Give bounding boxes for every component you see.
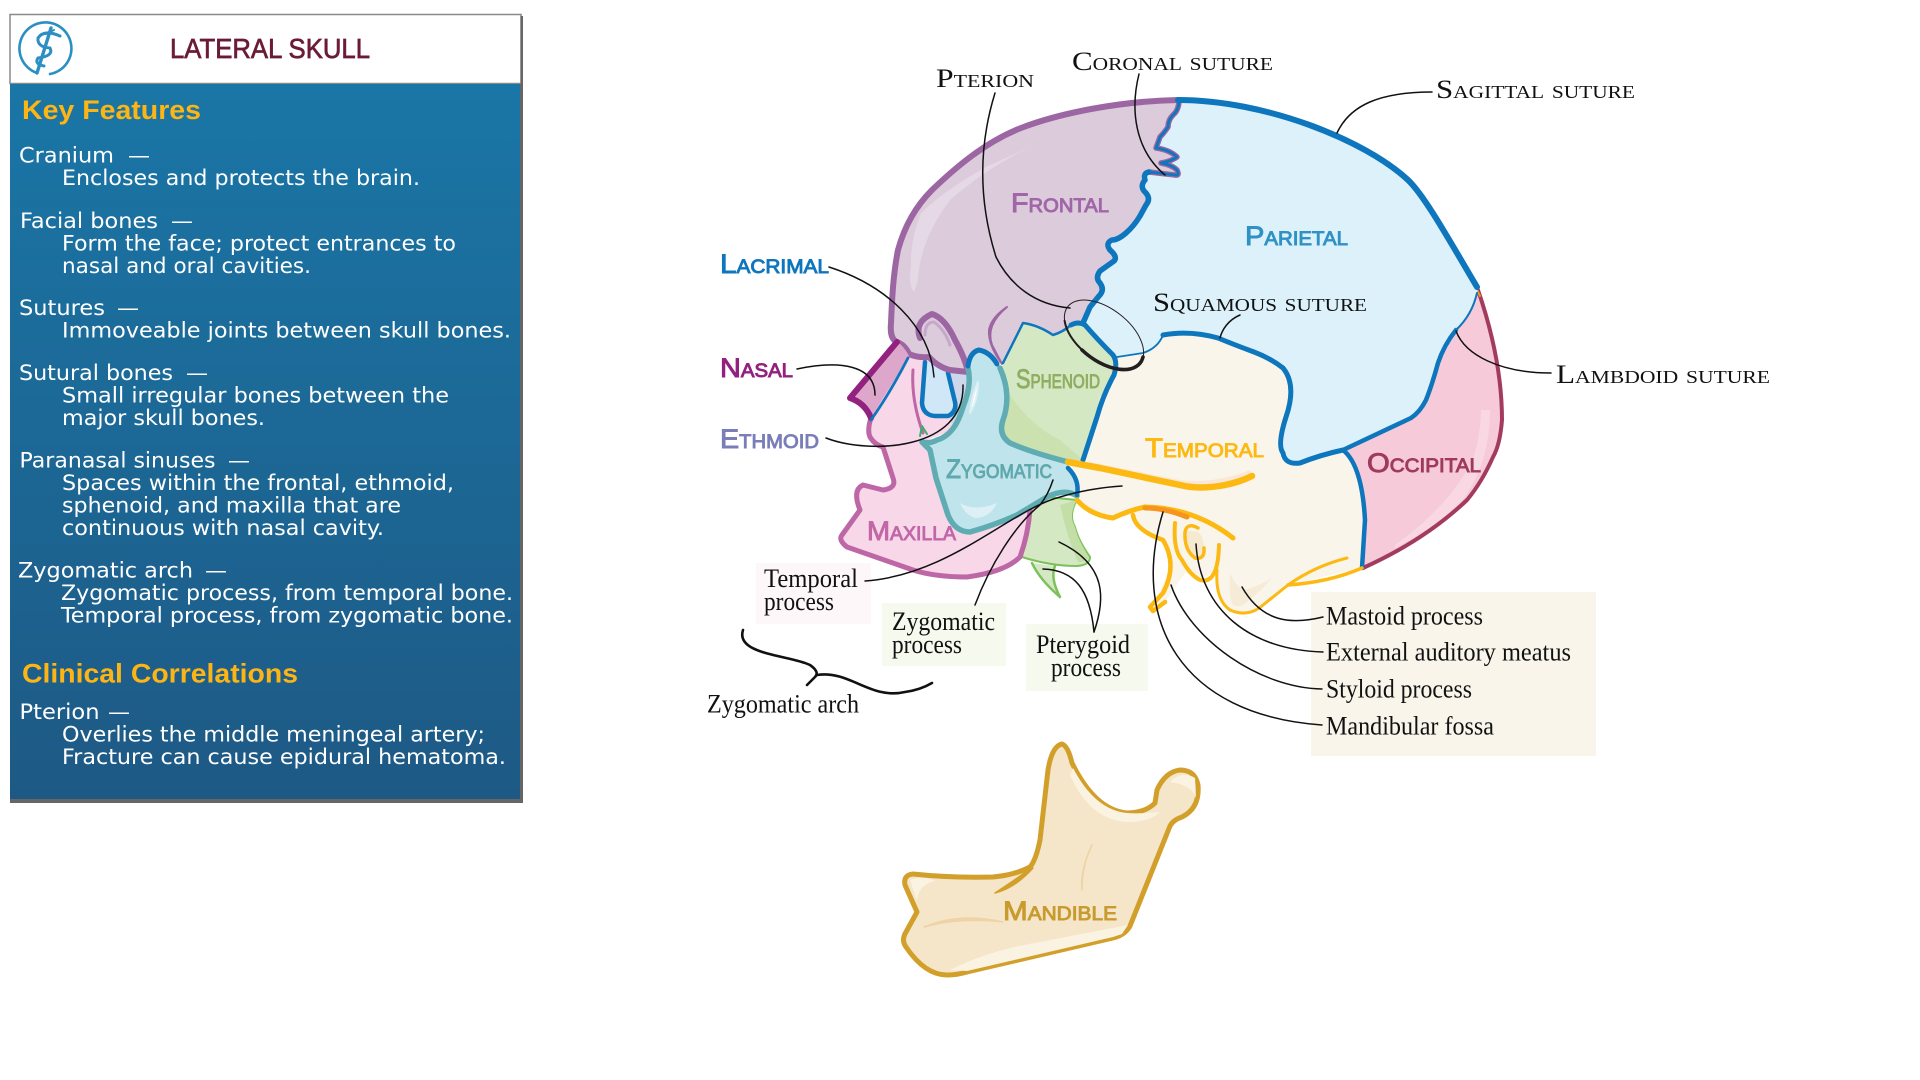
bone: zygomatic (922, 350, 1078, 532)
label: pterion: Pterion (936, 64, 1034, 93)
heading: key features: Key Features (22, 95, 201, 125)
text block: zygomatic arch: Zygomatic arch (18, 558, 193, 584)
label panels behind process names (756, 563, 1596, 756)
label: zygomatic arch: Zygomatic arch (707, 690, 859, 718)
temporal bone yellow outlines (1068, 462, 1362, 613)
label: ethmoid: Ethmoid (720, 424, 819, 454)
box: temporal features (1311, 592, 1596, 756)
bone: mandible (904, 744, 1198, 975)
label: pterygoid process: Pterygoid (1036, 630, 1130, 659)
text block: sutures: Immoveable joints between skull bones. (62, 318, 511, 344)
label: external auditory meatus: External auditory meatus (1326, 638, 1571, 666)
text block: sutural bones: Small irregular bones between the (62, 384, 449, 408)
heading: clinical correlations: Clinical Correlations (22, 658, 298, 688)
label: styloid process: Styloid process (1326, 674, 1472, 704)
bracket: zygomatic arch (742, 630, 932, 693)
label: mandible: Mandible (1003, 896, 1117, 926)
text block: zygomatic arch (18, 558, 513, 628)
pterion marker ellipse (1052, 286, 1156, 384)
bone: occipital (1343, 288, 1502, 568)
title bar (10, 14, 523, 85)
label: coronal suture: Coronal suture (1072, 47, 1273, 76)
bone: maxilla (841, 355, 1030, 577)
text block: facial bones: nasal and oral cavities. (62, 254, 311, 279)
text block: cranium: Encloses and protects the brain. (62, 166, 420, 191)
text block: zygomatic arch: Temporal process, from zygomatic bone. (60, 604, 513, 628)
box: temporal process (756, 563, 871, 624)
text block: facial bones: Form the face; protect entrances to (62, 232, 456, 256)
text block: sutural bones: major skull bones. (62, 406, 265, 431)
text block: paranasal sinuses: sphenoid, and maxilla that are (62, 494, 401, 518)
label: mandibular fossa: Mandibular fossa (1326, 712, 1494, 740)
label: lambdoid suture: Lambdoid suture (1556, 360, 1770, 389)
label: temporal: Temporal (1145, 433, 1264, 463)
title: LATERAL SKULL (170, 33, 370, 64)
label: sagittal suture: Sagittal suture (1436, 75, 1635, 104)
text block: pterion: Pterion (20, 700, 100, 725)
bone: parietal (1060, 100, 1478, 463)
label: zygomatic: Zygomatic (946, 454, 1052, 484)
sutures: coronal, sagittal, squamous, lambdoid (1083, 100, 1477, 568)
text block: cranium (19, 144, 420, 191)
label: squamous suture: Squamous suture (1153, 288, 1367, 317)
box: zygomatic process (882, 603, 1006, 666)
label: nasal: Nasal (720, 353, 793, 383)
label: pterygoid process: process (1051, 653, 1121, 682)
bone: temporal (1068, 333, 1365, 614)
bone: lacrimal and ethmoid (922, 360, 968, 428)
text block: paranasal sinuses: Paranasal sinuses (20, 448, 216, 474)
label: occipital: Occipital (1367, 448, 1481, 478)
box: pterygoid process (1026, 624, 1148, 691)
label: lacrimal: Lacrimal (720, 249, 829, 279)
label: parietal: Parietal (1245, 221, 1348, 251)
text block: zygomatic arch: Zygomatic process, from temporal bone. (61, 581, 513, 606)
text block: facial bones: Facial bones (20, 209, 158, 234)
label: maxilla: Maxilla (867, 516, 956, 546)
skull diagram (841, 100, 1502, 975)
text block: paranasal sinuses: — (228, 448, 250, 474)
panel: key features sidebar (10, 14, 523, 803)
label: temporal process: Temporal (764, 564, 858, 593)
label: zygomatic process: process (892, 630, 962, 659)
bone: pterygoid process (1022, 497, 1090, 597)
text block: cranium: — (128, 144, 150, 168)
text block: pterion: Overlies the middle meningeal artery; (62, 722, 485, 748)
label: sphenoid: Sphenoid (1016, 364, 1100, 394)
text block: sutural bones: — (186, 361, 208, 386)
text block: pterion: Fracture can cause epidural hematoma. (62, 745, 506, 770)
text block: cranium: Cranium (19, 144, 114, 168)
text block: facial bones (20, 209, 456, 279)
text block: zygomatic arch: — (205, 558, 227, 584)
text block: paranasal sinuses: Spaces within the frontal, ethmoid, (62, 471, 454, 496)
label: mastoid process: Mastoid process (1326, 602, 1483, 630)
icon: caduceus logo (19, 22, 71, 74)
blue panel body (10, 84, 523, 803)
text block: sutures (19, 296, 511, 344)
bone: sphenoid (1002, 323, 1116, 462)
text block: sutural bones: Sutural bones (19, 361, 173, 386)
text block: sutures: — (117, 296, 139, 321)
bone: frontal (891, 100, 1179, 372)
text block: sutures: Sutures (19, 296, 105, 321)
bone: nasal (850, 342, 909, 420)
text block: pterion: — (108, 700, 130, 725)
text block: pterion (20, 700, 506, 770)
label: frontal: Frontal (1011, 188, 1109, 218)
text block: paranasal sinuses (20, 448, 454, 541)
text block: paranasal sinuses: continuous with nasal cavity. (62, 516, 384, 541)
label: zygomatic process: Zygomatic (892, 607, 995, 636)
label: temporal process: process (764, 587, 834, 616)
text block: facial bones: — (171, 209, 193, 234)
text block: sutural bones (19, 361, 449, 431)
leader lines (797, 74, 1551, 725)
